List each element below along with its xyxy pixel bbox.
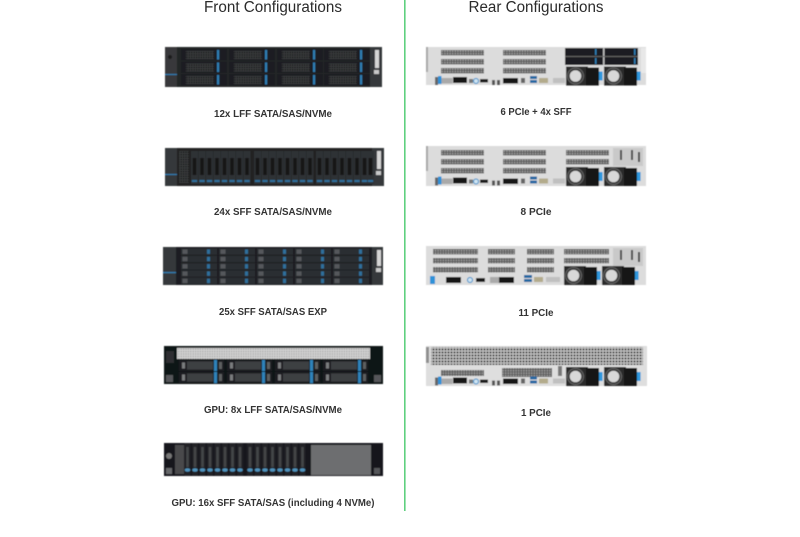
label: 6 PCIe + 4x SFF: 6 PCIe + 4x SFF: [500, 106, 572, 118]
panel: 6 PCIe + 4x SFF rear server: [426, 47, 646, 86]
panel: 24x SFF front server: [165, 148, 384, 186]
panel: GPU 16x SFF front server: [164, 443, 383, 476]
label: 24x SFF: 24x SFF SATA/SAS/NVMe: [214, 206, 332, 218]
panel: 11 PCIe rear server: [426, 246, 646, 285]
label: GPU 8x LFF: GPU: 8x LFF SATA/SAS/NVMe: [204, 404, 342, 416]
column divider: [404, 0, 406, 511]
panel: 25x SFF front server: [163, 247, 383, 285]
panel: 12x LFF front server: [165, 47, 382, 87]
label: GPU 16x SFF: GPU: 16x SFF SATA/SAS (including 4 NVMe): [172, 497, 374, 509]
label: 11 PCIe: 11 PCIe: [518, 307, 554, 319]
label: 12x LFF: 12x LFF SATA/SAS/NVMe: [214, 108, 332, 120]
panel: 1 PCIe rear server: [426, 346, 647, 386]
panel: 8 PCIe rear server: [426, 146, 646, 186]
label: 1 PCIe: 1 PCIe: [521, 407, 551, 419]
label: 8 PCIe: 8 PCIe: [520, 206, 552, 218]
panel: GPU 8x LFF front server: [164, 346, 383, 384]
label: 25x SFF: 25x SFF SATA/SAS EXP: [219, 306, 327, 318]
